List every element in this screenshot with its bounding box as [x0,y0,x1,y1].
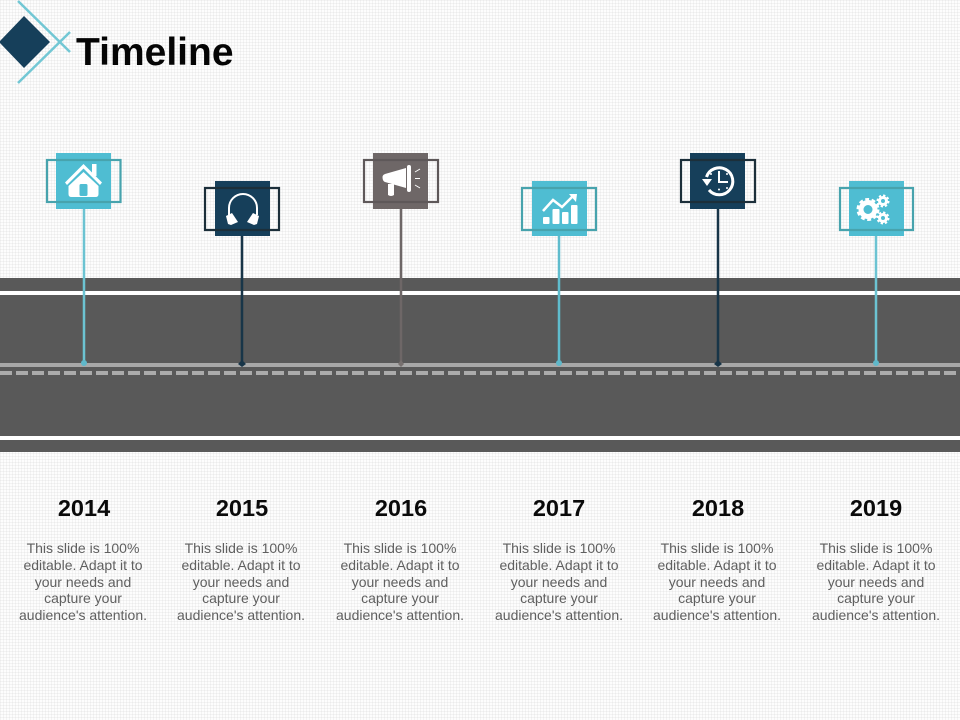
icon: megaphone [382,165,420,196]
icon: house [65,164,102,197]
road [0,278,960,452]
text 2019: audience's attention. [812,607,940,623]
text 2016: This slide is 100% [344,540,456,556]
icon: gears [858,196,888,224]
text 2014: audience's attention. [19,607,147,623]
text 2017: This slide is 100% [503,540,615,556]
year 2019: 2019 [850,495,902,521]
text 2017: your needs and [511,574,607,590]
text 2018: your needs and [669,574,765,590]
year 2014: 2014 [58,495,110,521]
text 2015: audience's attention. [177,607,305,623]
text 2016: capture your [361,590,439,606]
text 2015: your needs and [193,574,289,590]
text 2019: This slide is 100% [820,540,932,556]
year 2016: 2016 [375,495,427,521]
text 2015: capture your [202,590,280,606]
text 2014: editable. Adapt it to [23,557,143,573]
text 2018: audience's attention. [653,607,781,623]
marker 2016: megaphone sign [362,153,440,367]
text 2015 [177,540,305,623]
text 2019: capture your [837,590,915,606]
text 2016 [336,540,464,623]
text 2014: your needs and [35,574,131,590]
text 2015: editable. Adapt it to [181,557,301,573]
marker 2015: headphones sign [204,181,280,367]
text 2019 [812,540,940,623]
text 2017: capture your [520,590,598,606]
text 2014: This slide is 100% [27,540,139,556]
marker 2017: growth chart sign [520,181,598,366]
text 2019: editable. Adapt it to [816,557,936,573]
title: Timeline [76,31,234,74]
icon: bars with arrow [543,194,578,224]
header icon: diamond with crossing lines [0,0,71,84]
marker 2018: history clock sign [680,153,756,367]
text 2018: capture your [678,590,756,606]
text 2014 [19,540,147,623]
text 2018: This slide is 100% [661,540,773,556]
text 2017 [495,540,623,623]
icon: clock with arrow [702,168,733,195]
year 2018: 2018 [692,495,744,521]
text 2017: audience's attention. [495,607,623,623]
text 2016: your needs and [352,574,448,590]
text 2016: editable. Adapt it to [340,557,460,573]
text 2016: audience's attention. [336,607,464,623]
text 2014: capture your [44,590,122,606]
text 2015: This slide is 100% [185,540,297,556]
year 2015: 2015 [216,495,268,521]
marker 2014: home sign [46,153,122,366]
marker 2019: gears sign [838,181,914,366]
year 2017: 2017 [533,495,585,521]
icon: headphones [226,194,259,225]
text 2018: editable. Adapt it to [657,557,777,573]
text 2019: your needs and [828,574,924,590]
text 2018 [653,540,781,623]
text 2017: editable. Adapt it to [499,557,619,573]
